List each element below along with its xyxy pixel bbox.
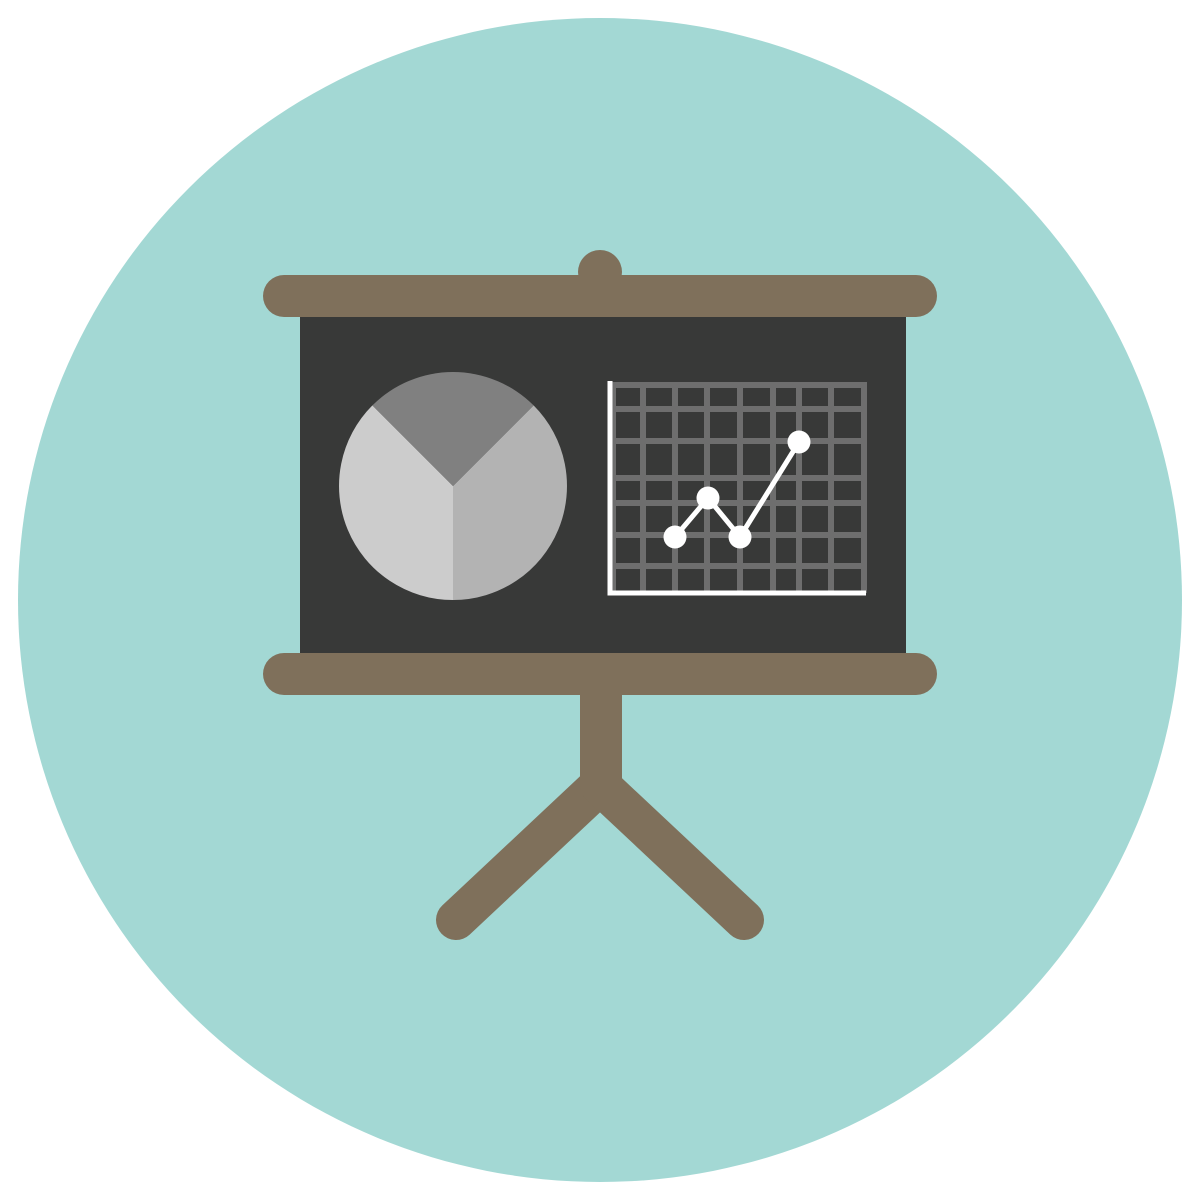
pie chart [339,372,567,600]
knob [578,250,622,294]
stand [456,690,744,920]
presentation board [263,250,937,920]
line chart [610,381,867,593]
screen [300,300,906,658]
top rail [263,275,937,317]
axes [610,381,866,593]
data line [664,430,810,548]
bottom rail [263,653,937,695]
